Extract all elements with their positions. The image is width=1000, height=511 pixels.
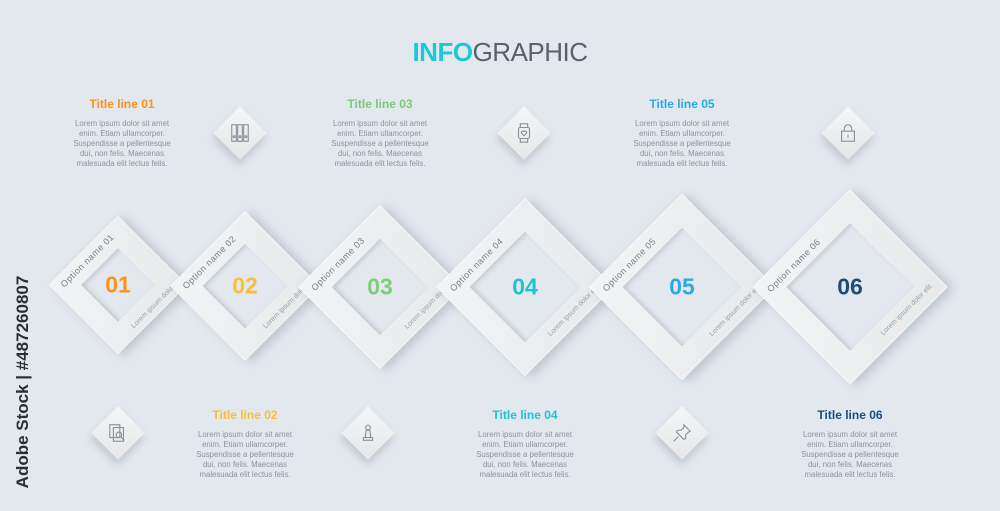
- icon: smartwatch: [497, 106, 551, 160]
- title: INFOGRAPHIC: [412, 37, 588, 67]
- text block: title line 03: Title line 03: [347, 97, 413, 111]
- frame 06: 06: [837, 274, 863, 300]
- icon: push pin: [655, 406, 709, 460]
- frame 02: Option name 02: [181, 234, 238, 291]
- text block: title line 01: [73, 97, 171, 168]
- icon: documents search: [91, 406, 145, 460]
- frame 01: 01: [105, 272, 131, 298]
- frame 04: [436, 198, 614, 376]
- frame 02: 02: [232, 272, 258, 298]
- frame 05: Lorem ipsum dolor elit.: [708, 283, 763, 338]
- text block: title line 06: [801, 408, 899, 479]
- side watermark text: Adobe Stock | #487260807: [13, 276, 32, 488]
- text block: title line 03: Lorem ipsum dolor sit amet enim. Etiam ullamcorper. Suspendisse a pellentesque dui, non felis. Maecenas malesuada elit lectus felis.: [331, 119, 429, 168]
- frame 01: [49, 216, 187, 354]
- frame 02: [170, 211, 320, 361]
- text block: title line 05: Lorem ipsum dolor sit amet enim. Etiam ullamcorper. Suspendisse a pellentesque dui, non felis. Maecenas malesuada elit lectus felis.: [633, 119, 731, 168]
- text block: title line 02: Lorem ipsum dolor sit amet enim. Etiam ullamcorper. Suspendisse a pellentesque dui, non felis. Maecenas malesuada elit lectus felis.: [196, 430, 294, 479]
- icon: padlock: [821, 106, 875, 160]
- frame 05: Option name 05: [601, 236, 658, 293]
- text block: title line 04: Lorem ipsum dolor sit amet enim. Etiam ullamcorper. Suspendisse a pellentesque dui, non felis. Maecenas malesuada elit lectus felis.: [476, 430, 574, 479]
- text block: title line 04: [476, 408, 574, 479]
- frame 05: 05: [669, 274, 695, 300]
- text block: title line 04: Title line 04: [492, 408, 558, 422]
- frame 01: Option name 01: [59, 232, 116, 289]
- frame 03: [298, 205, 462, 369]
- frame 06: [752, 189, 948, 385]
- frame 06: Lorem ipsum dolor elit.: [880, 282, 935, 337]
- text block: title line 05: [633, 97, 731, 168]
- frame 04: Lorem ipsum dolor elit.: [547, 283, 602, 338]
- frame 04: 04: [512, 274, 538, 300]
- frame 03: Lorem ipsum dolor.: [404, 283, 451, 331]
- text block: title line 06: Lorem ipsum dolor sit amet enim. Etiam ullamcorper. Suspendisse a pellentesque dui, non felis. Maecenas malesuada elit lectus felis.: [801, 430, 899, 479]
- frame 01: Lorem ipsum dolor.: [130, 283, 177, 330]
- frame 05: [589, 194, 775, 380]
- text block: title line 01: Lorem ipsum dolor sit amet enim. Etiam ullamcorper. Suspendisse a pellentesque dui, non felis. Maecenas malesuada elit lectus felis.: [73, 119, 171, 168]
- text block: title line 02: [196, 408, 294, 479]
- icon: chess pawn: [341, 406, 395, 460]
- icon: binders: [213, 106, 267, 160]
- frame 06: Option name 06: [765, 237, 822, 294]
- frame 03: Option name 03: [309, 235, 367, 293]
- text block: title line 06: Title line 06: [817, 408, 883, 422]
- text block: title line 03: [331, 97, 429, 168]
- frame 03: 03: [367, 274, 393, 300]
- text block: title line 01: Title line 01: [89, 97, 155, 111]
- frame 02: Lorem ipsum dolor.: [262, 283, 309, 330]
- text block: title line 02: Title line 02: [212, 408, 278, 422]
- text block: title line 05: Title line 05: [649, 97, 715, 111]
- frame 04: Option name 04: [448, 236, 505, 293]
